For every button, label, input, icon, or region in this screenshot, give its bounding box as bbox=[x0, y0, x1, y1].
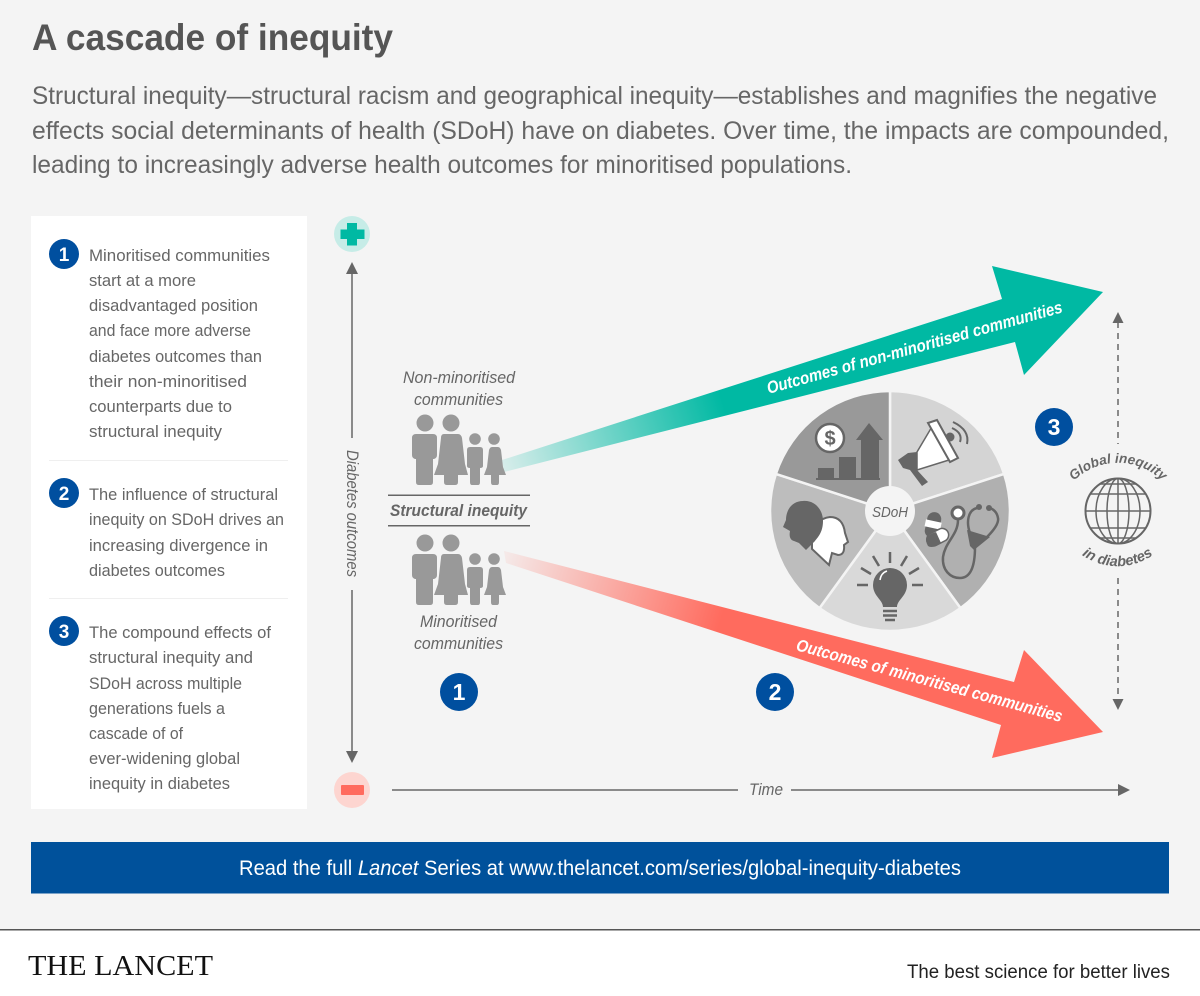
axis: time: Time bbox=[749, 780, 783, 799]
badge 3: 3 bbox=[1048, 414, 1060, 440]
step 2 text: inequity on SDoH drives an bbox=[89, 510, 284, 529]
step 2 text bbox=[49, 478, 284, 580]
step 2 text: The influence of structural bbox=[89, 485, 278, 504]
label: global inequity in diabetes: in diabetes bbox=[1082, 548, 1152, 566]
label: minoritised communities: communities bbox=[414, 634, 503, 653]
badge 1 bbox=[440, 673, 478, 711]
banner: read the full series bbox=[31, 842, 1169, 894]
icon: lightbulb bbox=[857, 552, 923, 620]
axis: time bbox=[392, 780, 1130, 799]
label: structural inequity: Structural inequity bbox=[390, 501, 528, 520]
step 1 text bbox=[49, 239, 270, 441]
icon: two heads bbox=[783, 501, 848, 565]
step 1 text: counterparts due to bbox=[89, 397, 232, 416]
label: global inequity in diabetes: Global inequity bbox=[1070, 453, 1168, 479]
title: A cascade of inequity bbox=[32, 17, 393, 58]
icon: pills and stethoscope bbox=[923, 504, 998, 578]
step 3 text: inequity in diabetes bbox=[89, 774, 230, 793]
icon: globe bbox=[1086, 478, 1150, 544]
label: non-minoritised communities: communities bbox=[414, 390, 503, 409]
icon: megaphone bbox=[898, 420, 967, 486]
intro text: leading to increasingly adverse health outcomes for minoritised populations. bbox=[32, 151, 852, 179]
icon: money and growth bbox=[816, 423, 883, 480]
panel: numbered explanation bbox=[31, 216, 307, 809]
icon: money and growth: $ bbox=[824, 428, 836, 450]
footer bbox=[0, 929, 1200, 996]
label: minoritised communities bbox=[414, 612, 503, 653]
label: minoritised communities: Minoritised bbox=[420, 612, 498, 631]
tagline: The best science for better lives bbox=[907, 962, 1170, 983]
step 1 text: structural inequity bbox=[89, 422, 222, 441]
pie: social determinants of health: SDoH bbox=[872, 504, 908, 521]
step 2 text: 2 bbox=[59, 484, 69, 505]
icon: minus bbox=[334, 772, 370, 808]
icon: family top bbox=[412, 414, 506, 485]
step 3 text: generations fuels a bbox=[89, 699, 226, 718]
step 1 text: diabetes outcomes than bbox=[89, 347, 262, 366]
banner: read the full series: Read the full Lancet Series at www.thelancet.com/series/global-inequity-diabetes bbox=[239, 857, 961, 880]
step 3 text: structural inequity and bbox=[89, 648, 253, 667]
axis: diabetes outcomes bbox=[343, 262, 362, 763]
step 1 text: 1 bbox=[59, 245, 70, 266]
badge 2: 2 bbox=[769, 679, 781, 705]
step 3 text: ever-widening global bbox=[89, 749, 240, 768]
step 1 text: Minoritised communities bbox=[89, 246, 270, 265]
intro text: effects social determinants of health (SDoH) have on diabetes. Over time, the impacts are compounded, bbox=[32, 117, 1169, 145]
badge 2 bbox=[756, 673, 794, 711]
arrow: minoritised outcomes: Outcomes of minoritised communities bbox=[794, 635, 1065, 726]
label: non-minoritised communities: Non-minoritised bbox=[403, 368, 516, 387]
intro text: Structural inequity—structural racism and geographical inequity—establishes and magnifies the negative bbox=[32, 82, 1157, 110]
pie: social determinants of health bbox=[770, 391, 1010, 631]
label: global inequity in diabetes bbox=[1070, 453, 1168, 566]
arrow: non-minoritised outcomes: Outcomes of non-minoritised communities bbox=[765, 298, 1065, 398]
step 3 text: cascade of of bbox=[89, 724, 183, 743]
arrow: minoritised outcomes bbox=[504, 551, 1103, 758]
step 3 text: 3 bbox=[59, 622, 69, 643]
badge 1: 1 bbox=[453, 679, 466, 705]
step 2 text: diabetes outcomes bbox=[89, 561, 225, 580]
step 3 text: SDoH across multiple bbox=[89, 674, 242, 693]
step 1 text: and face more adverse bbox=[89, 321, 251, 340]
intro text bbox=[32, 82, 1169, 179]
axis: diabetes outcomes: Diabetes outcomes bbox=[343, 450, 362, 577]
arrow: non-minoritised outcomes bbox=[502, 266, 1103, 472]
step 2 text: increasing divergence in bbox=[89, 536, 268, 555]
step 3 text: The compound effects of bbox=[89, 623, 271, 642]
step 1 text: disadvantaged position bbox=[89, 296, 258, 315]
label: non-minoritised communities bbox=[403, 368, 516, 409]
icon: plus bbox=[334, 216, 370, 252]
dashed arrow: global inequity gap bbox=[1112, 312, 1124, 710]
logo: The Lancet: THE LANCET bbox=[28, 950, 213, 982]
icon: family bottom bbox=[412, 534, 506, 605]
badge 3 bbox=[1035, 408, 1073, 446]
step 1 text: start at a more bbox=[89, 271, 196, 290]
step 3 text bbox=[49, 616, 271, 793]
step 1 text: their non-minoritised bbox=[89, 372, 247, 391]
